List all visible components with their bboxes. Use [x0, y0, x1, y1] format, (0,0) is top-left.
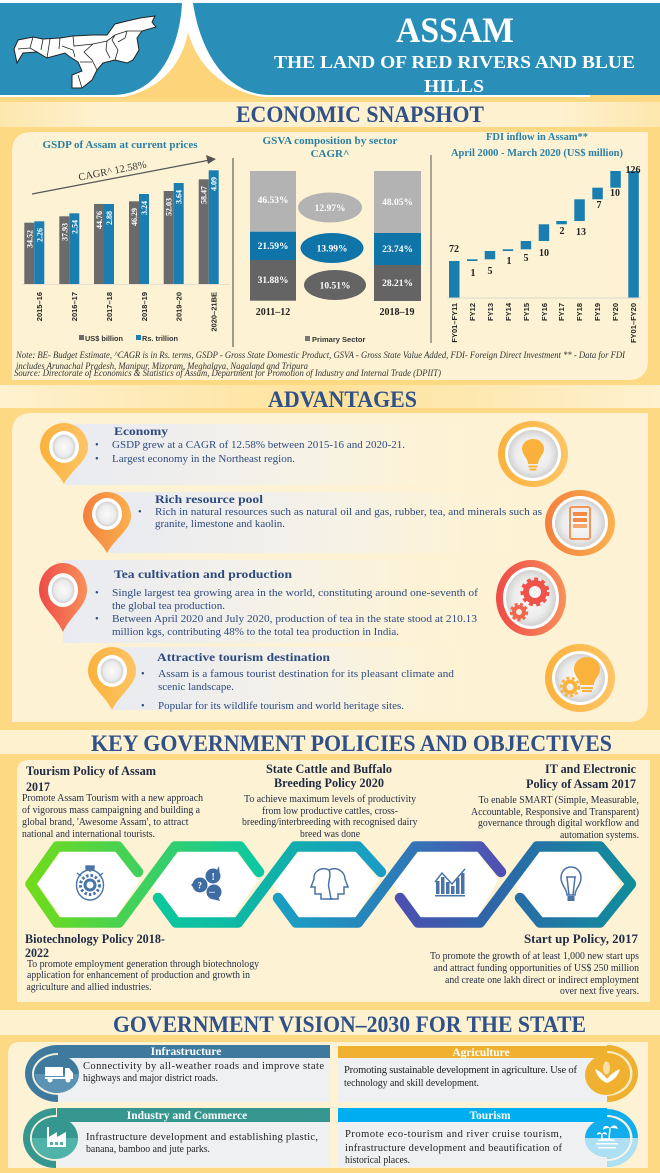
industry text — [86, 1132, 318, 1155]
tourism text: Attractive tourism destination — [157, 650, 330, 664]
policy: start up: over next five years. — [560, 986, 639, 997]
chart: FDI waterfall — [447, 131, 641, 343]
notes and source: Source: Directorate of Economics & Statistics of Assam, Department for Promotion of Industry and Internal Trade (DPIIT) — [14, 368, 441, 379]
policy: cattle and buffalo: To achieve maximum levels of productivity — [244, 794, 416, 805]
tourism text: • — [141, 669, 145, 680]
waterfall axis labels: FY18 — [575, 303, 584, 321]
heading: economic snapshot: ECONOMIC SNAPSHOT — [236, 102, 484, 127]
policy: biotechnology: agriculture and allied industries. — [26, 982, 152, 993]
chart: GSDP bars — [22, 139, 230, 343]
waterfall axis labels — [450, 302, 638, 343]
tea text: million kgs, contributing 48% to the total tea production in India. — [112, 627, 399, 638]
waterfall values: 10 — [610, 188, 620, 199]
panel: vision — [8, 1042, 648, 1168]
chart title: FDI — [451, 131, 623, 159]
bar values: 37.93 — [60, 223, 69, 241]
notes and source — [14, 350, 626, 379]
subtitle: THE LAND OF RED RIVERS AND BLUE — [274, 52, 635, 72]
policy: cattle and buffalo: breed was done — [300, 829, 361, 840]
infrastructure text: Connectivity by all-weather roads and improve state — [83, 1061, 324, 1072]
stacked bar 2011-12: 31.88% — [258, 276, 288, 286]
policy: biotechnology — [25, 932, 259, 993]
subtitle — [274, 52, 635, 96]
tourism vision text — [345, 1129, 562, 1166]
economy text: Largest economy in the Northeast region. — [112, 454, 295, 465]
waterfall values: 13 — [576, 227, 586, 238]
icon: question and exclamation bubbles: ? — [198, 880, 202, 890]
waterfall values — [449, 165, 640, 279]
chart: GSVA composition — [250, 135, 421, 344]
icon: question and exclamation bubbles: ! — [212, 872, 215, 883]
infrastructure text: highways and major district roads. — [83, 1073, 218, 1084]
policy: tourism: national and international tourists. — [22, 829, 155, 840]
bar values: 58.47 — [200, 186, 209, 204]
waterfall values: 2 — [560, 226, 564, 237]
map of Assam — [14, 16, 156, 88]
tourism vision text: infrastructure development and beautification of — [345, 1143, 562, 1154]
CAGR ellipses — [298, 192, 366, 300]
icon: gears medallion — [496, 560, 566, 636]
policy: biotechnology: Biotechnology Policy 2018- — [25, 932, 165, 946]
waterfall values: 10 — [539, 248, 549, 259]
policy: cattle and buffalo — [242, 762, 418, 840]
icon: gear and bulb medallion — [545, 644, 615, 712]
tea text: • — [95, 614, 99, 625]
policy: cattle and buffalo: Breeding Policy 2020 — [274, 776, 384, 790]
heading: government vision 2030: GOVERNMENT VISION–2030 FOR THE STATE — [113, 1012, 586, 1037]
bar values: 34.52 — [25, 230, 34, 248]
card: industry and commerce: Industry and Commerce — [127, 1110, 247, 1122]
heading: key government policies: KEY GOVERNMENT POLICIES AND OBJECTIVES — [91, 731, 612, 756]
policy: start up: Start up Policy, 2017 — [524, 932, 638, 946]
tea text: Between April 2020 and July 2020, production of tea in the state stood at 210.13 — [112, 614, 477, 625]
waterfall axis labels: FY13 — [486, 303, 495, 321]
rich resource text: • — [138, 507, 142, 518]
tourism text — [141, 650, 455, 712]
policy: cattle and buffalo: State Cattle and Buffalo — [266, 762, 392, 776]
policy: tourism: Promote Assam Tourism with a new approach — [22, 793, 203, 804]
policy: tourism — [22, 764, 203, 840]
hexagon chain — [30, 846, 631, 922]
policy: IT and electronic: Policy of Assam 2017 — [526, 777, 636, 791]
legend: GSDP: Rs. trillion — [142, 334, 178, 343]
waterfall values: 5 — [488, 266, 492, 277]
icon: light bulb medallion — [498, 421, 568, 487]
economy text: • — [95, 440, 99, 451]
stacked bar 2011-12: 46.53% — [258, 196, 288, 206]
tourism vision text: historical places. — [345, 1155, 410, 1166]
waterfall axis labels: FY19 — [593, 303, 602, 321]
agriculture text: technology and skill development. — [344, 1078, 479, 1089]
item: tourism destination — [88, 644, 615, 712]
year axis labels: 2015–16 — [35, 292, 44, 321]
rich resource text: Rich resource pool — [155, 492, 264, 506]
policy: biotechnology: To promote employment generation through biotechnology — [27, 959, 259, 970]
section band: economic snapshot — [0, 102, 660, 127]
policy: biotechnology: application for enhancement of production and growth in — [27, 970, 250, 981]
waterfall axis labels: FY17 — [557, 303, 566, 321]
waterfall values: 72 — [449, 244, 459, 255]
chart title: GSDP: GSDP of Assam at current prices — [42, 139, 198, 151]
year axis labels — [35, 292, 219, 332]
panel: economic snapshot — [12, 131, 648, 380]
bar values: 3.24 — [140, 201, 149, 215]
year axis labels: 2018–19 — [140, 292, 149, 321]
bar values: 2.54 — [70, 220, 79, 234]
stacked bar 2018-19: 2018–19 — [380, 307, 414, 318]
icon: phone medallion — [545, 490, 615, 556]
waterfall values: 5 — [524, 253, 528, 264]
year axis labels: 2017–18 — [105, 292, 114, 321]
icon: question and exclamation bubbles: ... — [209, 886, 215, 895]
infrastructure text — [83, 1061, 324, 1084]
tea text: Tea cultivation and production — [114, 567, 292, 581]
waterfall axis labels: FY01–FY11 — [450, 303, 459, 343]
policy: IT and electronic: To enable SMART (Simple, Measurable, — [478, 795, 639, 806]
card: tourism: Tourism — [469, 1110, 511, 1122]
tourism vision text: Promote eco-tourism and river cruise tourism, — [345, 1129, 562, 1140]
policy: tourism: 2017 — [26, 780, 50, 794]
policy: IT and electronic: governance through digital workflow and — [478, 818, 639, 829]
year axis labels: 2016–17 — [70, 292, 79, 321]
policy: IT and electronic: IT and Electronic — [545, 762, 636, 776]
section band: advantages — [0, 385, 660, 408]
policy: cattle and buffalo: from low productive cattles, cross- — [262, 806, 398, 817]
stacked bar 2011-12: 21.59% — [258, 242, 288, 252]
waterfall axis labels: FY01–FY20 — [629, 303, 638, 343]
chart title: FDI: FDI inflow in Assam** — [486, 131, 588, 143]
tea text: Single largest tea growing area in the world, constituting around one-seventh of — [112, 588, 479, 599]
card: agriculture — [338, 1045, 638, 1102]
CAGR ellipses: 10.51% — [320, 282, 350, 292]
bar values: 2.88 — [105, 211, 114, 225]
policy: IT and electronic: automation systems. — [560, 830, 639, 841]
legend: primary sector: Primary Sector — [312, 335, 365, 344]
policy: cattle and buffalo: breeding/interbreeding with recognised dairy — [242, 817, 418, 828]
chart title: FDI: April 2000 - March 2020 (US$ million) — [451, 147, 623, 159]
bar values — [25, 177, 219, 248]
policy: start up: and create one lakh direct or indirect employment — [445, 975, 639, 986]
waterfall values: 7 — [596, 200, 602, 211]
chart title: GSVA — [262, 135, 398, 160]
waterfall values: 126 — [626, 165, 640, 176]
waterfall axis labels: FY16 — [540, 303, 549, 321]
policy: start up: and attract funding opportunities of US$ 250 million — [434, 963, 639, 974]
waterfall bars — [447, 171, 641, 298]
stacked bar 2018-19: 48.05% — [382, 198, 413, 208]
stacked bar 2011-12: 2011–12 — [256, 307, 290, 318]
icon: two heads — [311, 869, 348, 899]
tourism text: Popular for its wildlife tourism and world heritage sites. — [158, 701, 404, 712]
icon: bar chart with trend — [435, 869, 465, 896]
legend: GSDP: US$ billion — [85, 334, 123, 343]
policy: tourism: of vigorous mass campaigning and building a — [22, 805, 201, 816]
item: rich resource pool — [83, 490, 615, 556]
tea text: • — [95, 588, 99, 599]
card: industry and commerce — [23, 1108, 330, 1168]
stacked bar 2018-19: 28.21% — [382, 279, 413, 289]
policy: start up: To promote the growth of at least 1,000 new start ups — [430, 951, 639, 962]
rich resource text: granite, limestone and kaolin. — [155, 519, 285, 530]
icon: corn — [585, 1045, 638, 1102]
year axis labels: 2020–21BE — [210, 292, 219, 332]
item: tea cultivation — [39, 560, 566, 643]
tourism text: scenic landscape. — [158, 682, 234, 693]
agriculture text: Promoting sustainable development in agriculture. Use of — [344, 1065, 578, 1076]
heading: advantages: ADVANTAGES — [268, 387, 417, 412]
panel: advantages — [12, 413, 648, 722]
waterfall values: 1 — [470, 268, 476, 279]
bars — [22, 170, 230, 284]
economy text — [95, 424, 405, 465]
waterfall axis labels: FY14 — [504, 302, 513, 321]
header banner — [0, 0, 660, 98]
stacked bar 2018-19 — [374, 171, 421, 318]
card: infrastructure — [25, 1045, 330, 1102]
card: agriculture: Agriculture — [452, 1047, 510, 1059]
policy: start up — [430, 932, 639, 997]
chart title: GSVA: CAGR^ — [311, 148, 349, 160]
agriculture text — [344, 1065, 578, 1089]
legend: GSDP — [79, 334, 178, 343]
pin — [83, 492, 131, 553]
tea text: the global tea production. — [112, 601, 225, 612]
title: ASSAM — [396, 10, 514, 50]
panel: key policies — [17, 760, 650, 1002]
pin — [88, 647, 136, 710]
icon: palm island — [585, 1109, 638, 1167]
item: economy — [40, 421, 568, 487]
tourism text: Assam is a famous tourist destination for its pleasant climate and — [158, 669, 455, 680]
bar values: 3.64 — [175, 190, 184, 204]
bar values: 52.03 — [165, 198, 174, 216]
rich resource text — [138, 492, 542, 530]
section band: vision — [0, 1010, 660, 1035]
tourism text: • — [141, 701, 145, 712]
bar values: 2.26 — [35, 228, 44, 242]
policy: biotechnology: 2022 — [25, 946, 49, 960]
icon: stopwatch gear — [76, 866, 104, 900]
waterfall axis labels: FY15 — [522, 303, 531, 321]
stacked bar 2018-19: 23.74% — [382, 245, 413, 255]
bar values: 46.29 — [130, 208, 139, 226]
notes and source: includes Arunachal Pradesh, Manipur, Mizoram, Meghalaya, Nagaland and Tripura — [16, 362, 308, 372]
section band: key policies — [0, 730, 660, 754]
rich resource text: Rich in natural resources such as natural oil and gas, rubber, tea, and minerals such as — [155, 507, 542, 518]
subtitle: HILLS — [424, 76, 484, 96]
economy text: Economy — [114, 424, 168, 438]
icon: question and exclamation bubbles — [191, 866, 222, 901]
tea text — [95, 567, 479, 638]
icon: truck — [25, 1045, 79, 1102]
card: infrastructure: Infrastructure — [151, 1046, 221, 1058]
CAGR ellipses: 13.99% — [317, 244, 347, 254]
policy: tourism: global brand, 'Awesome Assam', to attract — [22, 817, 189, 828]
icon: factory — [23, 1108, 78, 1168]
industry text: banana, bamboo and jute parks. — [86, 1144, 210, 1155]
chart title: GSVA: GSVA composition by sector — [262, 135, 398, 147]
pin — [39, 563, 87, 632]
CAGR arrow — [32, 155, 216, 194]
bar values: 44.76 — [95, 211, 104, 229]
card: tourism — [338, 1108, 638, 1167]
CAGR arrow: CAGR^ 12.58% — [78, 160, 148, 184]
waterfall values: 1 — [506, 256, 512, 267]
icon: light bulb outline — [561, 867, 581, 901]
policy: IT and electronic — [471, 762, 639, 841]
waterfall axis labels: FY12 — [468, 303, 477, 321]
bar values: 4.09 — [210, 177, 219, 191]
policy: IT and electronic: Accountable, Responsive and Transparent) — [471, 807, 639, 818]
CAGR ellipses: 12.97% — [315, 204, 345, 214]
stacked bar 2011-12 — [250, 171, 296, 318]
policy: tourism: Tourism Policy of Assam — [26, 764, 157, 778]
waterfall axis labels: FY20 — [611, 303, 620, 321]
pin — [40, 423, 88, 484]
year axis labels: 2019–20 — [175, 292, 184, 321]
economy text: • — [95, 454, 99, 465]
industry text: Infrastructure development and establishing plastic, — [86, 1132, 318, 1143]
economy text: GSDP grew at a CAGR of 12.58% between 2015-16 and 2020-21. — [112, 440, 405, 451]
